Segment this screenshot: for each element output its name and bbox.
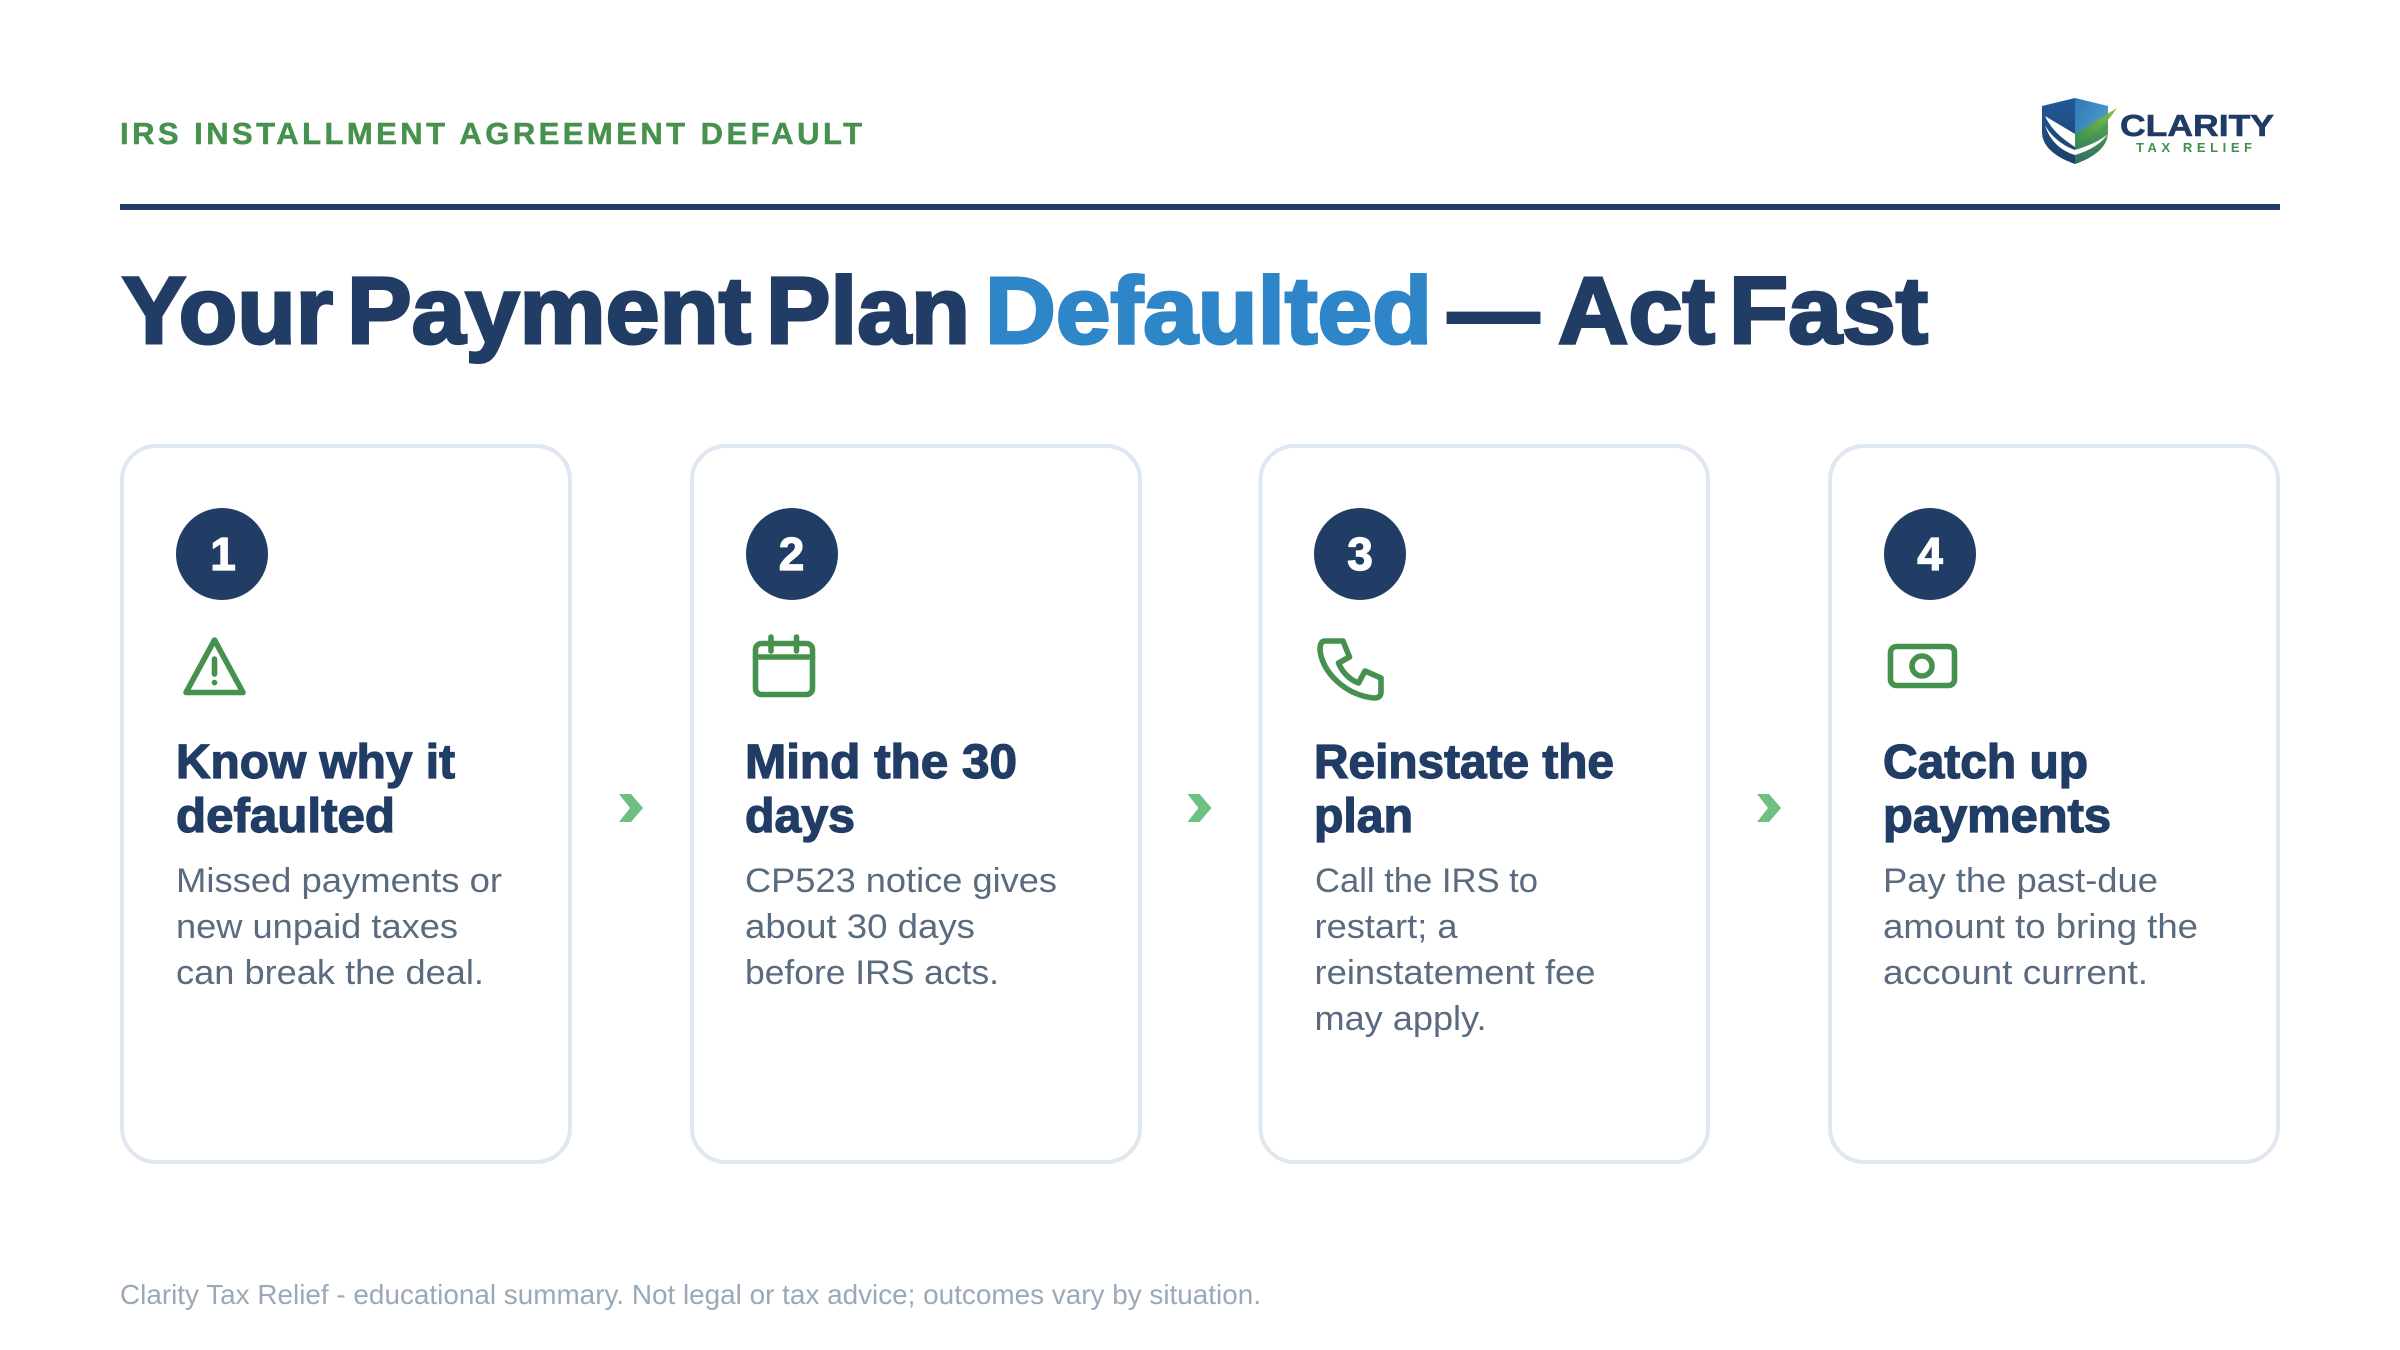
footer disclaimer: Clarity Tax Relief - educational summary. Not legal or tax advice; outcomes vary by situation. (120, 1279, 1261, 1310)
title (122, 258, 1928, 364)
step description: Pay the past-due (1883, 862, 2158, 900)
arrow 3 (1757, 794, 1781, 822)
step heading: Mind the 30 (745, 736, 1017, 789)
icon: calendar (756, 637, 812, 694)
arrow 2 (1188, 794, 1212, 822)
card outline (692, 446, 1140, 1162)
step description (176, 862, 502, 992)
step heading: Reinstate the (1314, 736, 1614, 789)
step heading: Catch up (1883, 736, 2088, 789)
step description: restart; a (1314, 908, 1458, 946)
title: Fast (1729, 258, 1928, 364)
step description: account current. (1883, 954, 2148, 992)
title: — (1448, 258, 1539, 364)
step heading (1314, 736, 1614, 843)
arrow 1 (619, 794, 643, 822)
card outline (122, 446, 570, 1162)
card outline (1830, 446, 2278, 1162)
logo wordmark: CLARITY (2120, 108, 2274, 143)
step heading: days (745, 790, 855, 843)
step description: new unpaid taxes (176, 908, 458, 946)
number badge 1: 1 (210, 528, 236, 580)
step description: Call the IRS to (1315, 862, 1538, 900)
panel: step 3 (1260, 446, 1708, 1162)
number badge 4 (1884, 508, 1976, 600)
number badge 1 (176, 508, 268, 600)
step description: may apply. (1314, 1000, 1486, 1038)
panel: step 1 (122, 446, 570, 1162)
step description: about 30 days (745, 908, 975, 946)
card outline (1260, 446, 1708, 1162)
logo: Clarity Tax Relief (2042, 98, 2274, 164)
step description: amount to bring the (1883, 908, 2198, 946)
number badge 2: 2 (779, 528, 804, 580)
step description: CP523 notice gives (745, 862, 1057, 900)
step description: before IRS acts. (745, 954, 999, 992)
title: Act (1558, 258, 1715, 364)
step description (745, 862, 1057, 992)
number badge 2 (746, 508, 838, 600)
number badge 4: 4 (1917, 528, 1943, 580)
icon: banknote (1890, 646, 1954, 686)
panel: step 2 (692, 446, 1140, 1162)
step description (1883, 862, 2198, 992)
step heading: plan (1314, 790, 1413, 843)
icon: warning triangle (186, 640, 243, 692)
title: Your (122, 258, 333, 364)
step heading: payments (1883, 790, 2111, 843)
step heading (1883, 736, 2111, 843)
eyebrow heading: IRS INSTALLMENT AGREEMENT DEFAULT (120, 116, 862, 151)
number badge 3: 3 (1347, 528, 1373, 580)
title: Plan (766, 258, 970, 364)
title: Defaulted (985, 258, 1432, 364)
step heading: defaulted (176, 790, 395, 843)
step heading: Know why it (176, 736, 455, 789)
icon: phone (1320, 641, 1381, 698)
logo tagline: TAX RELIEF (2136, 140, 2252, 155)
panel: step 4 (1830, 446, 2278, 1162)
step description (1314, 862, 1596, 1038)
step description: Missed payments or (176, 862, 502, 900)
title: Payment (347, 258, 751, 364)
step heading (176, 736, 455, 843)
step description: can break the deal. (176, 954, 484, 992)
header rule (120, 204, 2280, 210)
number badge 3 (1314, 508, 1406, 600)
logo shield (2042, 98, 2117, 164)
step description: reinstatement fee (1314, 954, 1596, 992)
step heading (745, 736, 1017, 843)
